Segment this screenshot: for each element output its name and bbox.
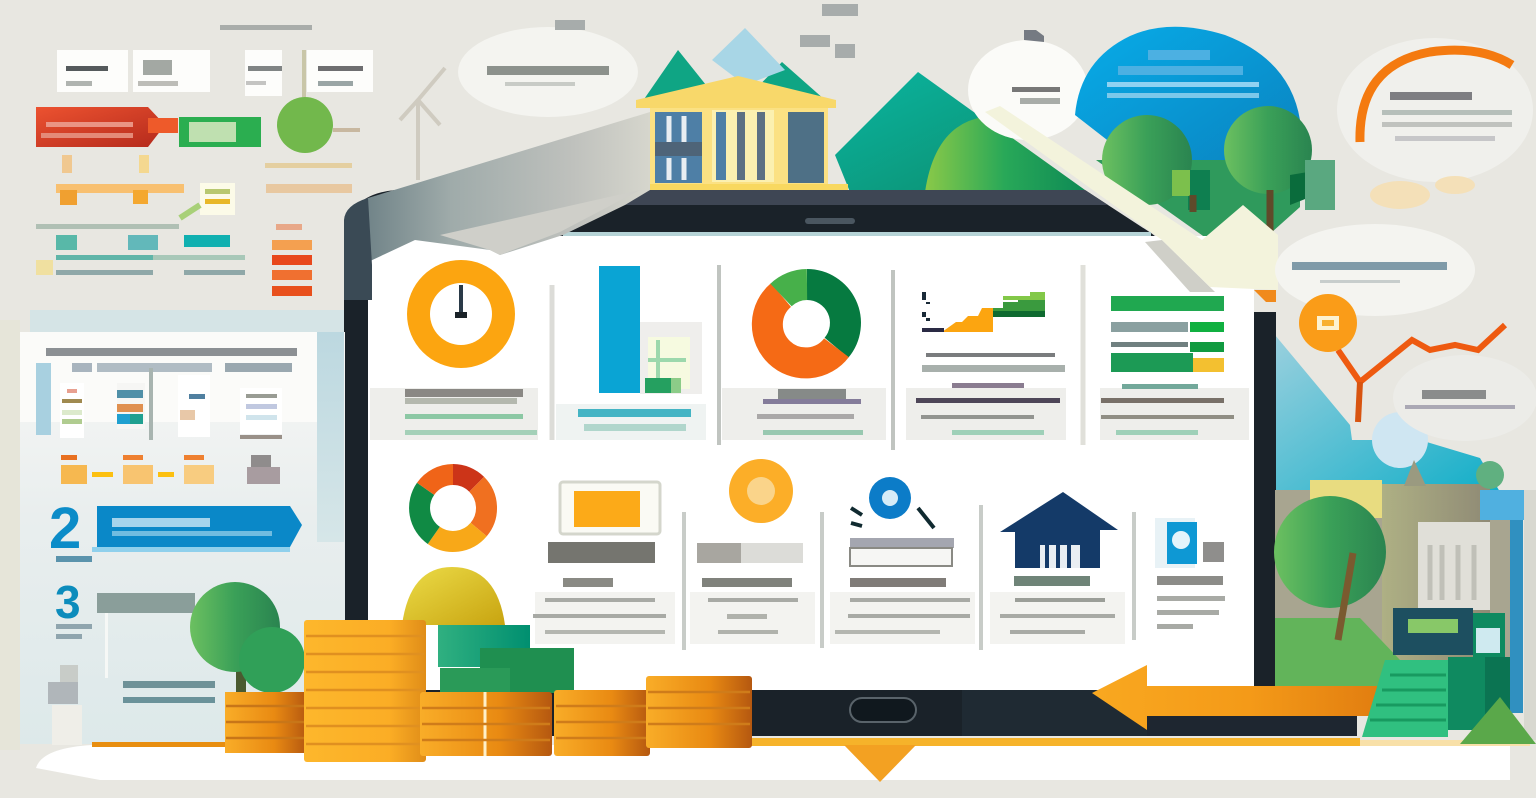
coins short left: [225, 692, 307, 753]
tablet camera: [805, 218, 855, 224]
right background wedge: [1275, 335, 1500, 492]
panel: top row cards: [370, 260, 1249, 450]
clock card text: [405, 389, 537, 435]
icon: blue gear: [835, 477, 970, 634]
tablet top band: [625, 190, 1108, 205]
icon: blue document: [1155, 518, 1225, 629]
cash stack: [438, 625, 574, 693]
tablet screen: [368, 236, 1254, 690]
mountains behind building: [640, 28, 1085, 192]
diagonal pale arrow: [985, 106, 1278, 292]
step 2 banner: 2: [49, 496, 81, 561]
yellow sun behind coins: [402, 567, 505, 625]
ground strip: [36, 745, 1510, 780]
icon: bank building: [636, 76, 848, 192]
left panel: process cards: [20, 332, 345, 744]
step 3 block: [48, 576, 215, 745]
bar chart: [578, 266, 702, 431]
blue cloud with trees: [968, 27, 1335, 243]
tablet: [344, 190, 1276, 736]
panel: bottom row cards: [420, 459, 1225, 650]
grey ribbon across tablet corner: [344, 112, 650, 300]
icon: orange coin: [697, 459, 803, 634]
icon: card with orange bar: [533, 482, 666, 634]
speech bubble right: [1275, 224, 1475, 316]
wind turbine sketch and cloud: [400, 4, 858, 180]
top right gauge callout: [1337, 38, 1533, 209]
step 3 block: 3: [55, 576, 81, 628]
arrow: orange pointing down: [844, 745, 916, 782]
icon: clock: [407, 260, 515, 368]
icon: navy house: [1000, 492, 1118, 634]
table widget: [1101, 296, 1234, 435]
area chart: [916, 292, 1065, 435]
tablet home button: [850, 698, 916, 722]
right scene: building, tree, hill: [1274, 460, 1536, 740]
coins middle: [420, 692, 552, 756]
coin stacks: [36, 620, 1530, 780]
tablet bezel: [344, 190, 1276, 736]
calculator: [1362, 608, 1536, 744]
top left flow diagram: [36, 25, 373, 296]
coins right 1: [554, 690, 650, 756]
donut chart: [757, 284, 863, 435]
icon: small donut: [420, 474, 487, 541]
coins right 2: [646, 676, 752, 748]
tree beside coins: [190, 582, 305, 695]
right chart: trend line: [1299, 294, 1536, 468]
step 2 banner: [49, 496, 302, 562]
coins tall: [304, 620, 426, 762]
arrow: orange pointing left: [1092, 665, 1377, 736]
